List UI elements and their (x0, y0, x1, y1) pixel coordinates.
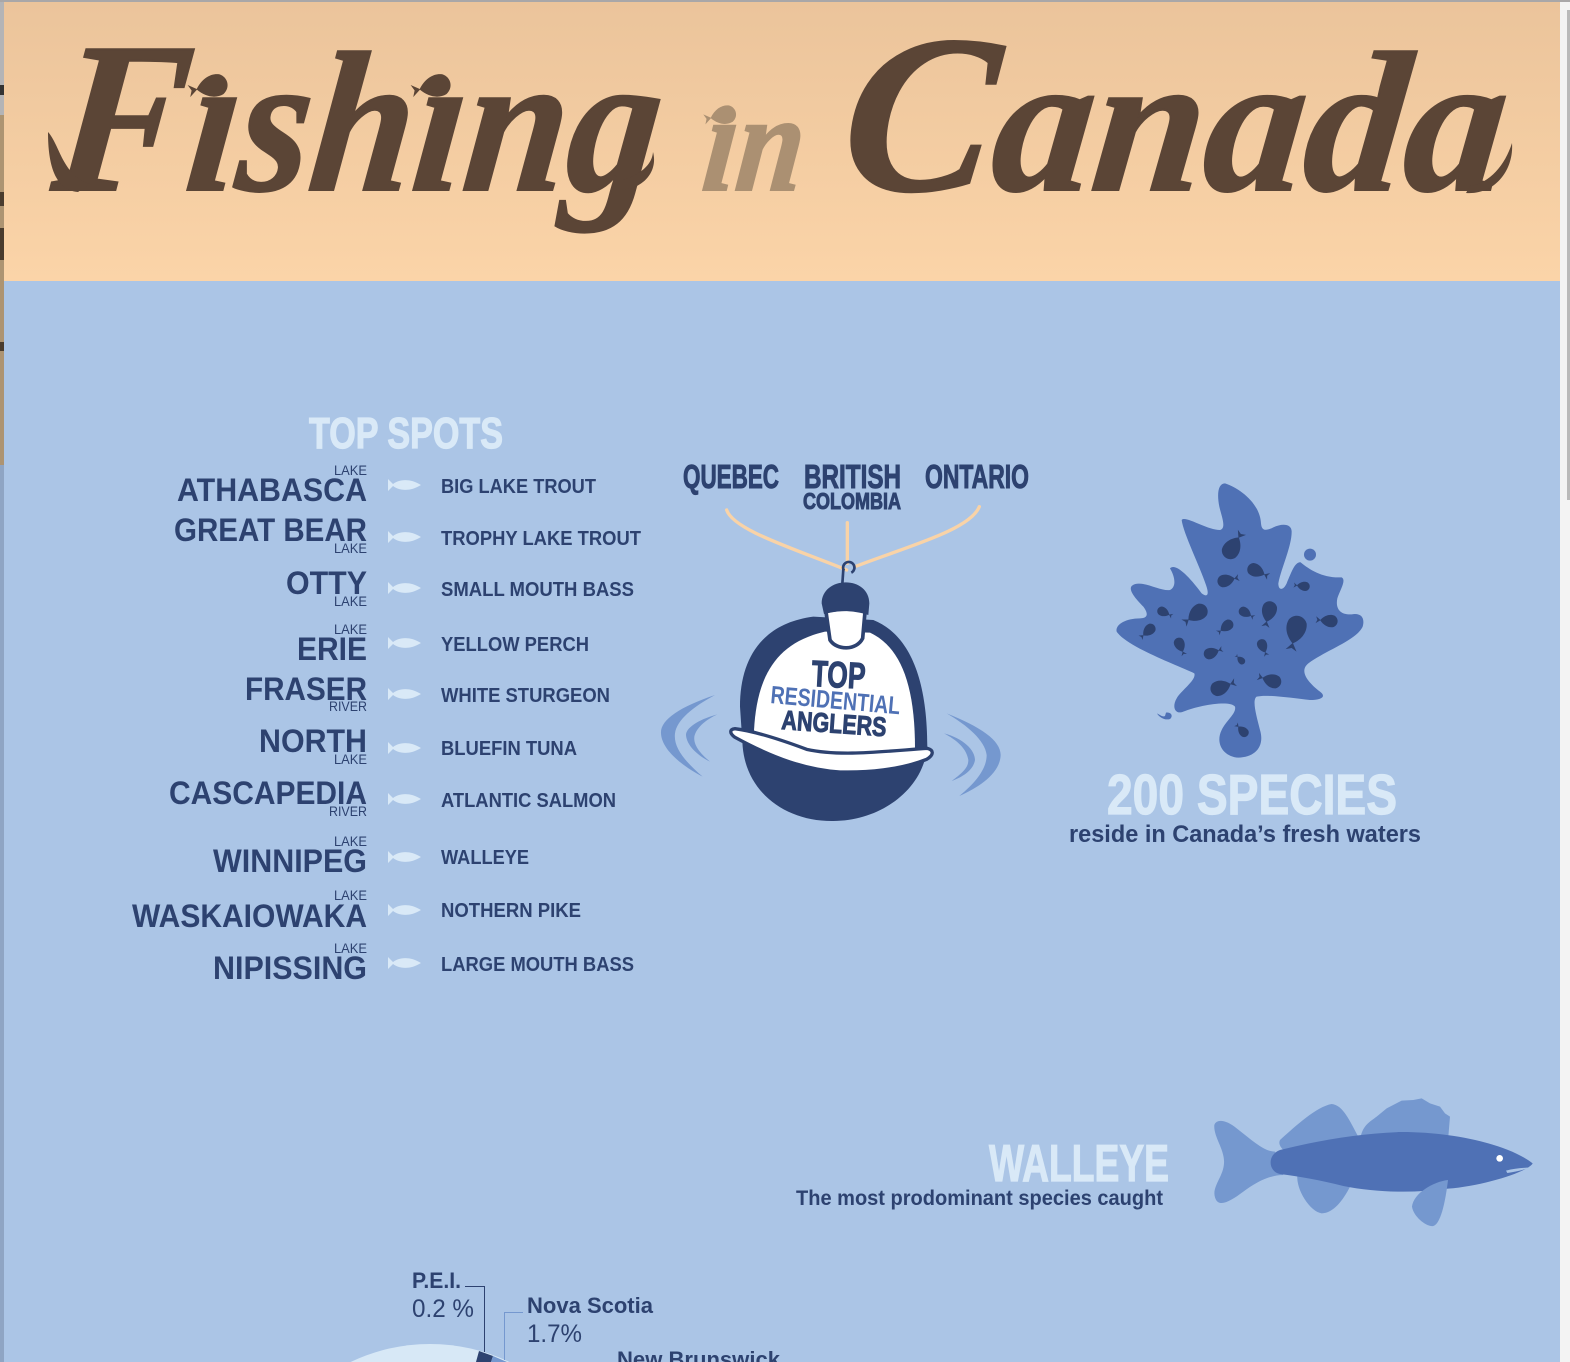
pie label: Nova Scotia (504, 1293, 654, 1360)
spot: Waskaiowaka: WASKAIOWAKA (132, 898, 367, 934)
buoy label: ANGLERS (781, 705, 887, 742)
buoy neck (826, 609, 865, 648)
province labels: BRITISH (804, 458, 901, 495)
spot: Cascapedia: ATLANTIC SALMON (441, 790, 616, 812)
spot: Otty: SMALL MOUTH BASS (441, 579, 634, 601)
buoy label: RESIDENTIAL (769, 681, 901, 720)
spot: Cascapedia: CASCAPEDIA (169, 775, 367, 811)
title wordmark (48, 40, 1506, 234)
province labels: QUEBEC (683, 458, 779, 495)
buoy body (740, 617, 927, 821)
spot: Athabasca: BIG LAKE TROUT (441, 476, 596, 498)
illustration: anglers buoy (661, 507, 1001, 821)
spot: Great Bear: GREAT BEAR (174, 512, 367, 548)
spot: Waskaiowaka: LAKE (334, 887, 367, 903)
spot: Erie (297, 621, 589, 667)
panel: top spots list (132, 462, 641, 986)
buoy label (769, 653, 901, 742)
spot: Nipissing: LARGE MOUTH BASS (441, 954, 634, 976)
spot: Great Bear: TROPHY LAKE TROUT (441, 528, 641, 550)
spot: Nipissing (213, 940, 634, 986)
illustration: walleye fish (1214, 1098, 1533, 1226)
spot: Winnipeg: WINNIPEG (213, 843, 367, 879)
stat: 200 species: 200 SPECIES (1107, 763, 1397, 827)
pie label: P.E.I.: 0.2 % (412, 1295, 474, 1323)
spot: Athabasca (177, 462, 596, 508)
spot: Athabasca: ATHABASCA (177, 472, 367, 508)
pie label: Nova Scotia: Nova Scotia (527, 1293, 654, 1318)
spot: Erie: LAKE (334, 621, 367, 637)
spot: Athabasca: LAKE (334, 462, 367, 478)
title: Fishing: Fishing (44, 0, 675, 237)
stat: walleye heading (796, 1135, 1169, 1210)
buoy label: TOP (811, 653, 867, 697)
spot: Nipissing: LAKE (334, 940, 367, 956)
spot: Winnipeg: WALLEYE (441, 847, 529, 869)
header banner (0, 0, 1570, 281)
pie label: Nova Scotia: 1.7% (527, 1320, 582, 1348)
pie label: P.E.I. (412, 1268, 484, 1352)
title decoration: fish and swashes (48, 72, 1512, 193)
spot: Waskaiowaka (132, 887, 581, 934)
spot: Erie: ERIE (297, 631, 367, 667)
spot: North: BLUEFIN TUNA (441, 738, 577, 760)
spot: Fraser: FRASER (245, 671, 367, 707)
pie label: P.E.I.: P.E.I. (412, 1268, 461, 1293)
buoy cap (822, 582, 869, 615)
buoy brim (731, 729, 932, 772)
spot: Otty: LAKE (334, 593, 367, 609)
spot: Winnipeg: LAKE (334, 833, 367, 849)
heading: top spots: TOP SPOTS (309, 409, 503, 458)
province labels (683, 458, 1029, 514)
spot: Otty (286, 565, 634, 609)
stat: 200 species: reside in Canada’s fresh waters (1069, 821, 1421, 848)
spot: North: NORTH (259, 723, 367, 759)
spot: Nipissing: NIPISSING (213, 950, 367, 986)
fishing lines (727, 507, 979, 570)
spot: Fraser: WHITE STURGEON (441, 685, 610, 707)
spot: Great Bear (174, 512, 641, 556)
spot: Fraser: RIVER (329, 698, 367, 714)
illustration: maple leaf with fish (1116, 483, 1363, 758)
spot: Winnipeg (213, 833, 529, 879)
province labels: COLOMBIA (803, 488, 901, 514)
spot: North (259, 723, 577, 767)
spot: Erie: YELLOW PERCH (441, 634, 589, 656)
spot: Great Bear: LAKE (334, 540, 367, 556)
spot: Cascapedia (169, 775, 616, 819)
spot: Otty: OTTY (286, 565, 367, 601)
pie chart: provinces (351, 1344, 509, 1362)
water ripples (661, 695, 1001, 796)
stat: walleye heading: The most prodominant species caught (796, 1187, 1163, 1210)
spot: North: LAKE (334, 751, 367, 767)
stat: walleye heading: WALLEYE (989, 1135, 1169, 1193)
hook (842, 562, 854, 584)
title: in: in (697, 66, 813, 221)
province labels: ONTARIO (925, 458, 1029, 495)
stat: 200 species (1069, 763, 1421, 848)
spot: Cascapedia: RIVER (329, 803, 367, 819)
spot: Fraser (245, 671, 610, 714)
spot: Waskaiowaka: NOTHERN PIKE (441, 900, 581, 922)
